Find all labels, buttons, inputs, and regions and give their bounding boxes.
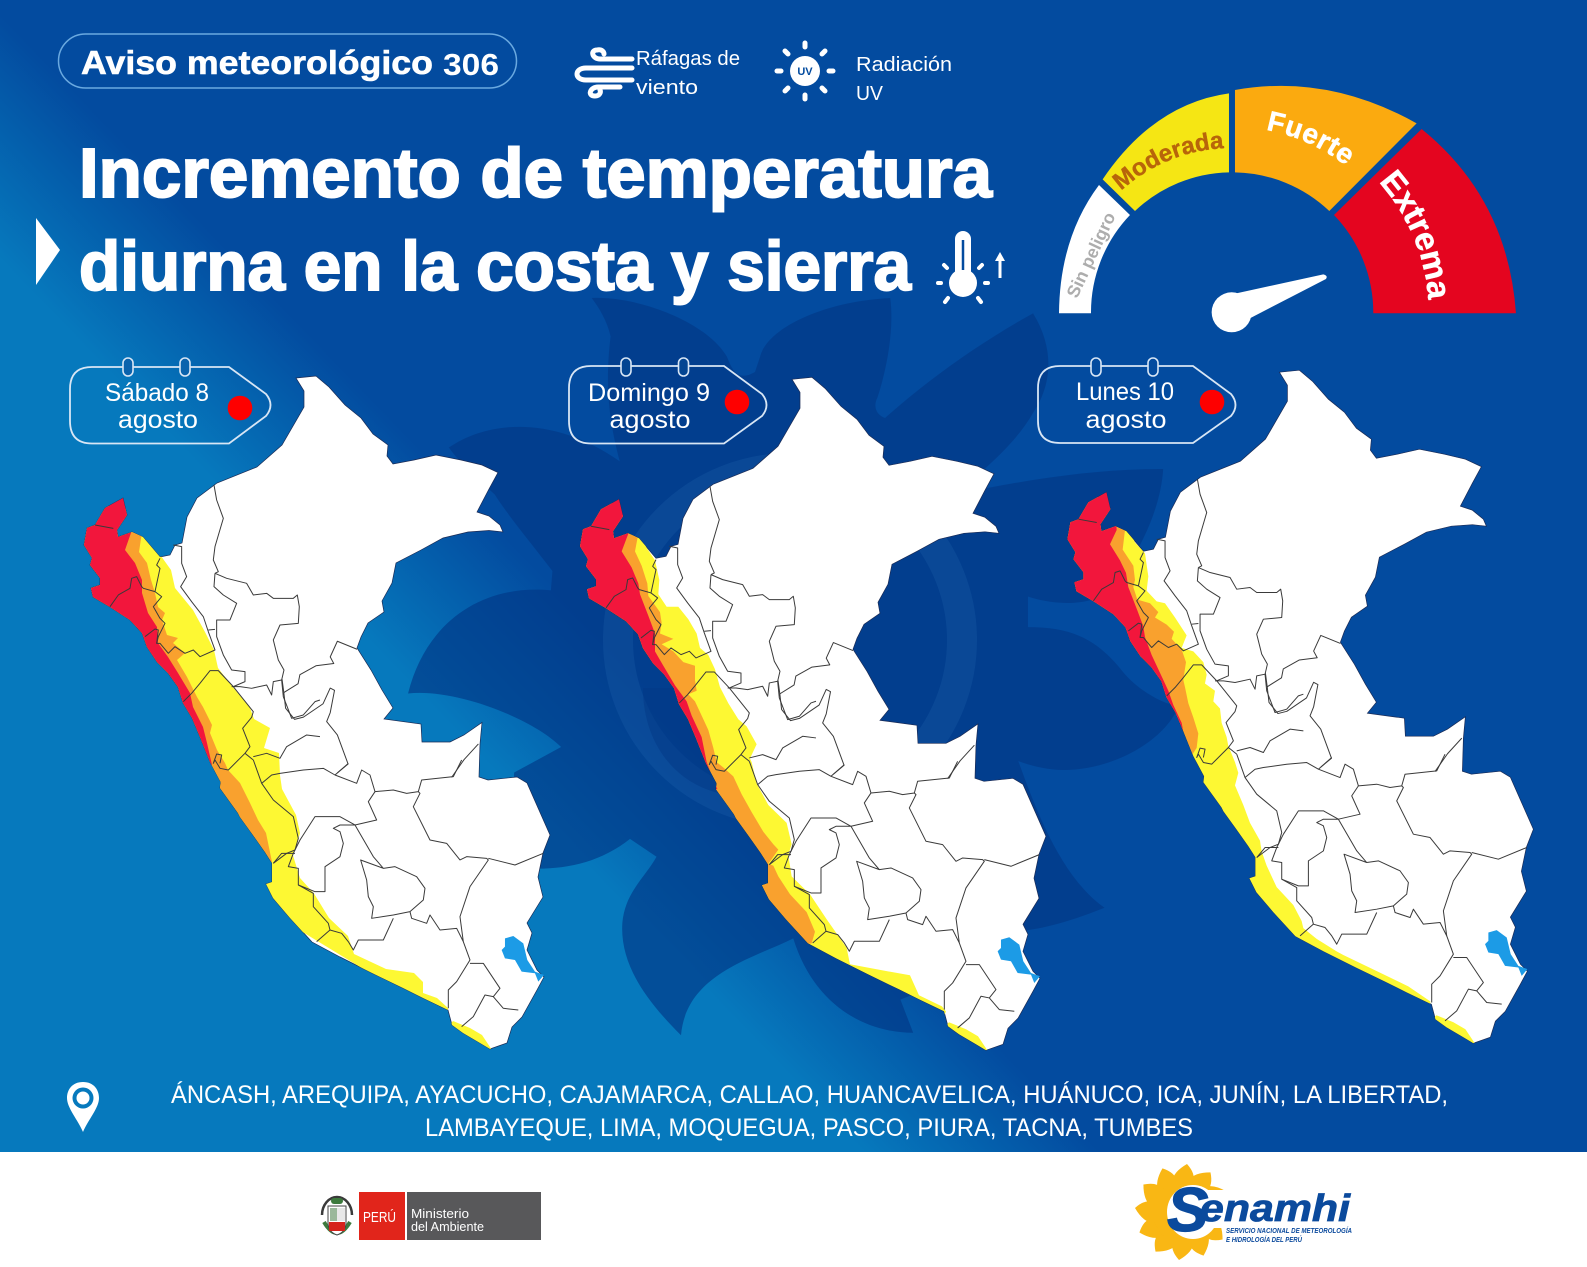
affected regions list: LAMBAYEQUE, LIMA, MOQUEGUA, PASCO, PIURA, TACNA, TUMBES — [425, 1114, 1193, 1142]
label: Radiación UV: UV — [856, 83, 884, 105]
zone: red extreme — [84, 498, 212, 766]
footer band — [0, 1152, 1587, 1267]
zones: yellow, orange, red — [580, 499, 946, 1014]
logo: Perú Ministerio del Ambiente: del Ambiente — [411, 1219, 484, 1234]
title: Incremento de temperatura — [79, 134, 993, 212]
map: Lunes 10 — [1050, 370, 1533, 1044]
date tag: Domingo 9 agosto — [569, 358, 766, 444]
logo: Senamhi: S — [1167, 1176, 1208, 1245]
logo: Senamhi: enamhi — [1200, 1188, 1352, 1230]
icon: UV radiation sun: UV — [797, 66, 813, 78]
department borders — [95, 485, 543, 1027]
label: Radiación UV — [856, 54, 952, 105]
zone: orange strong — [84, 512, 272, 862]
severity gauge: Sin peligro — [1063, 209, 1120, 301]
zone: yellow moderate — [60, 500, 448, 1020]
icon: wind gusts — [577, 50, 632, 96]
severity gauge: Moderada — [1112, 132, 1224, 190]
lake and cold zone — [1485, 930, 1527, 976]
map: Sábado 8 — [60, 376, 550, 1050]
date tag: Lunes 10 agosto: agosto — [1086, 406, 1166, 434]
label: Ráfagas de viento — [636, 48, 740, 99]
date tag: Lunes 10 agosto: Lunes 10 — [1076, 378, 1174, 406]
icon: location pin — [67, 1082, 99, 1132]
date tag: Sábado 8 agosto — [70, 358, 270, 444]
icon: thermometer rising — [938, 231, 1005, 302]
coat of arms — [322, 1197, 352, 1235]
department borders — [591, 486, 1039, 1028]
zones: yellow, orange, red — [1050, 480, 1430, 1019]
date tag: Domingo 9 agosto: agosto — [610, 406, 690, 434]
severity gauge: Extrema — [1380, 168, 1446, 300]
title: diurna en la costa y sierra — [79, 227, 912, 305]
logo: Perú Ministerio del Ambiente: Ministerio — [411, 1206, 469, 1221]
logo: Senamhi — [1135, 1164, 1352, 1260]
logo: Senamhi: E HIDROLOGÍA DEL PERÚ — [1226, 1235, 1303, 1244]
logo: Senamhi: SERVICIO NACIONAL DE METEOROLOGÍA — [1226, 1226, 1352, 1235]
icon: UV radiation sun — [777, 43, 833, 99]
label: Ráfagas de viento: viento — [636, 77, 698, 99]
date tag: Sábado 8 agosto: agosto — [118, 406, 198, 434]
sun emblem — [1135, 1164, 1242, 1260]
title — [79, 134, 993, 305]
header pill: Aviso meteorológico 306: 306 — [443, 47, 499, 82]
header pill: Aviso meteorológico 306 — [58, 34, 516, 88]
date tag: Domingo 9 agosto: Domingo 9 — [588, 379, 710, 407]
date tag: Lunes 10 agosto — [1038, 358, 1236, 443]
date tag: Sábado 8 agosto: Sábado 8 — [105, 379, 209, 407]
affected regions list — [171, 1080, 1448, 1142]
lake and cold zone — [998, 937, 1040, 983]
logo: Perú Ministerio del Ambiente — [322, 1192, 541, 1240]
label: Ráfagas de viento: Ráfagas de — [636, 48, 740, 70]
map: Domingo 9 — [560, 377, 1046, 1051]
label: Radiación UV: Radiación — [856, 54, 952, 76]
department borders — [1078, 479, 1527, 1021]
affected regions list: ÁNCASH, AREQUIPA, AYACUCHO, CAJAMARCA, CALLAO, HUANCAVELICA, HUÁNUCO, ICA, JUNÍN, LA LIBERTAD, — [171, 1080, 1448, 1109]
severity gauge — [1059, 86, 1516, 332]
logo: Perú Ministerio del Ambiente: PERÚ — [363, 1209, 396, 1226]
severity gauge: Fuerte — [1267, 111, 1352, 164]
header pill: Aviso meteorológico 306: Aviso meteorológico — [81, 44, 433, 81]
lake and cold zone — [502, 936, 544, 982]
arrow marker — [36, 218, 60, 285]
background sun watermark — [408, 298, 1178, 1035]
gauge needle — [1212, 274, 1327, 332]
